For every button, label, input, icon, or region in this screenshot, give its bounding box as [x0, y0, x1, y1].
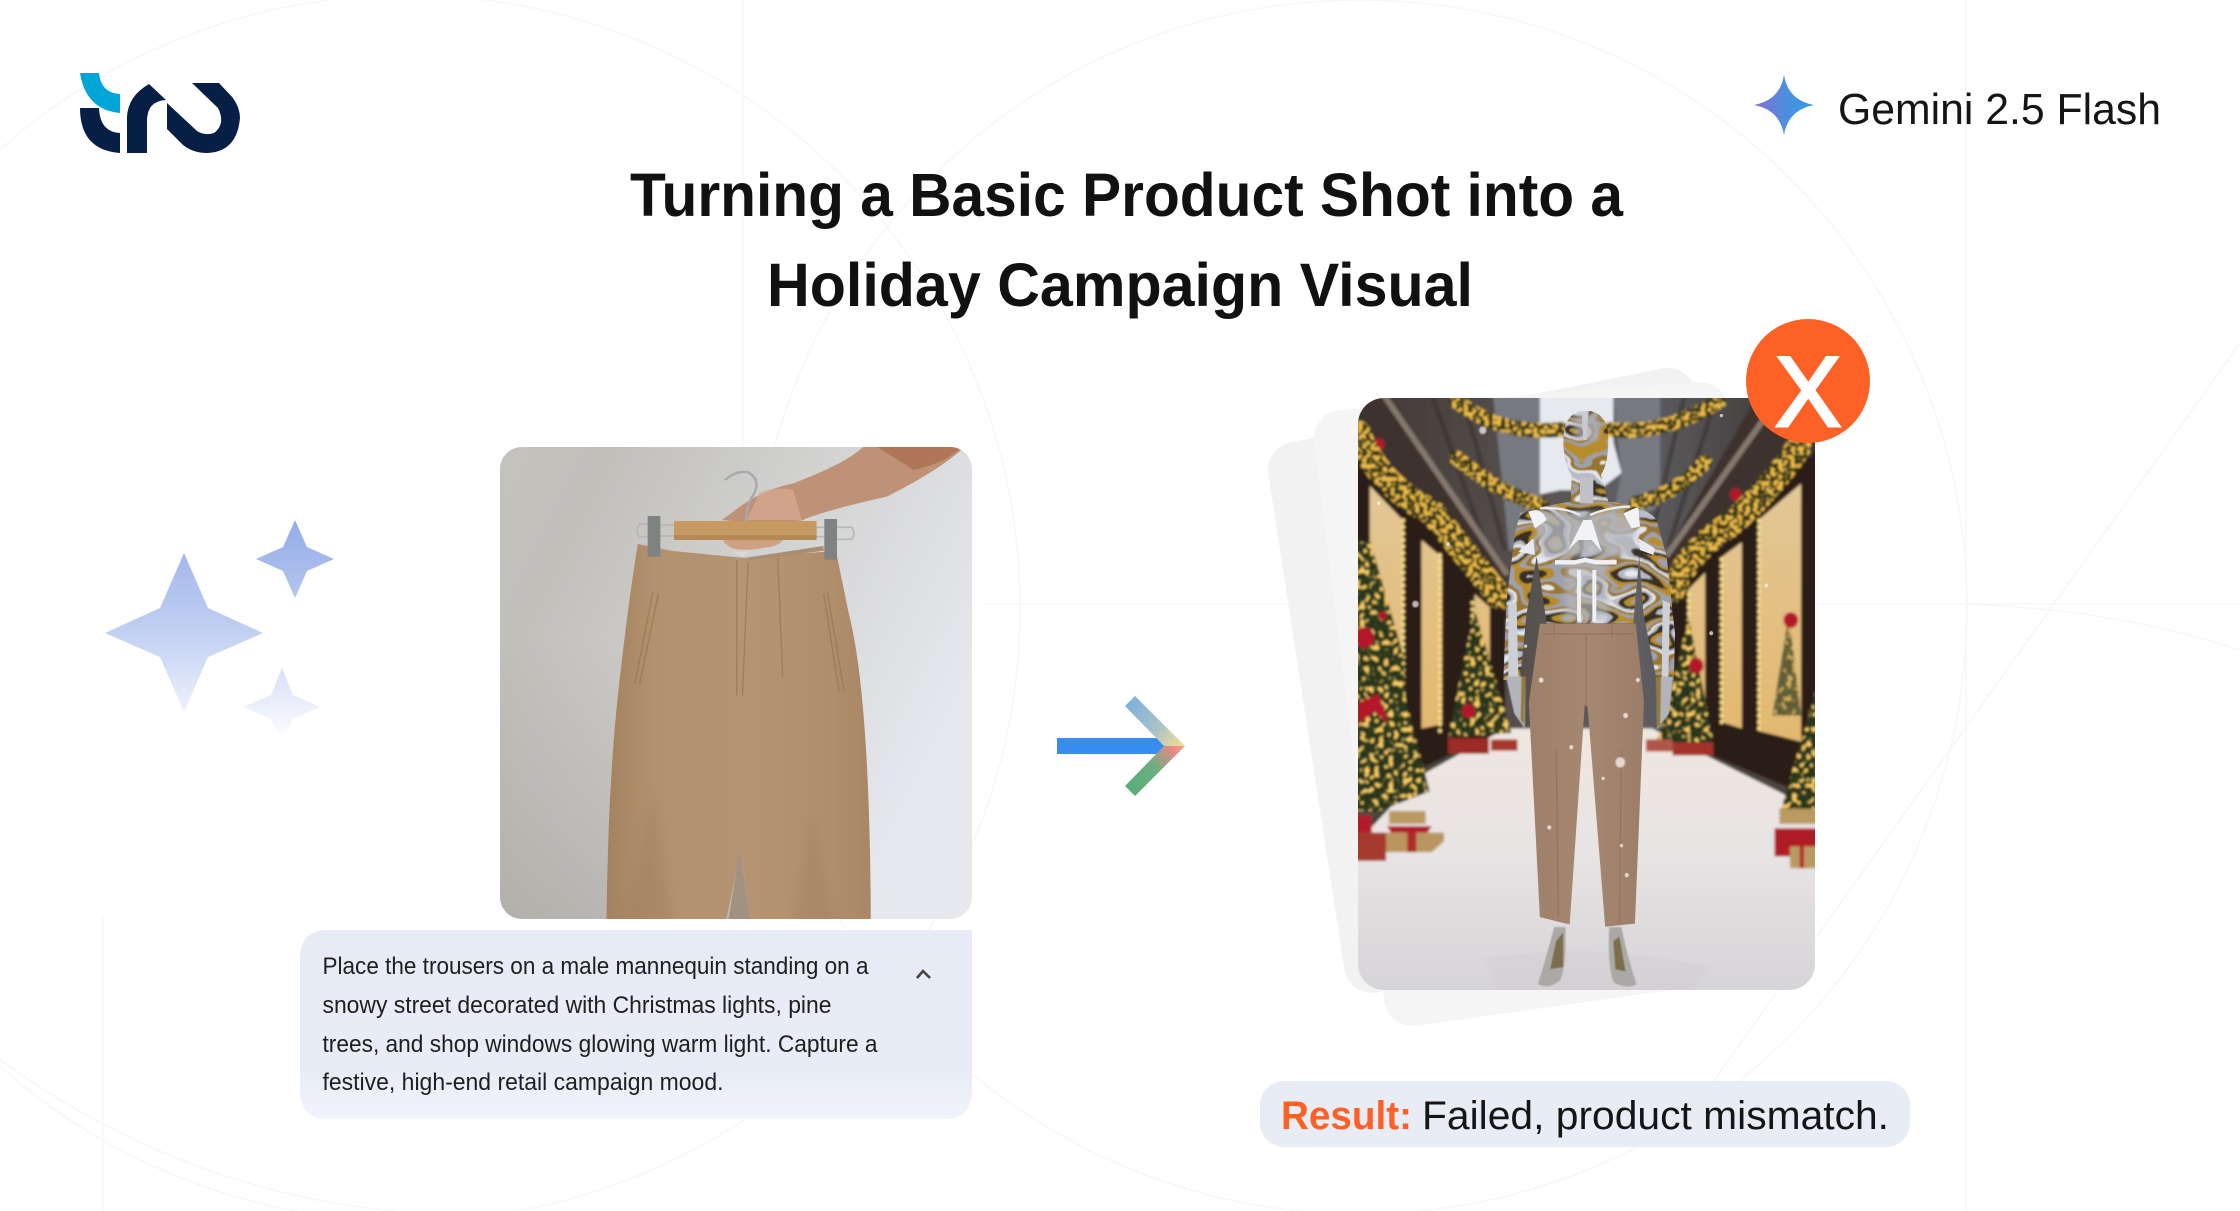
- prompt text: Place the trousers on a male mannequin standing on a: [322, 953, 869, 980]
- blurred street backdrop: [1350, 390, 1823, 997]
- shoes: [1538, 927, 1637, 987]
- gifts: [1350, 738, 1820, 868]
- snowflakes: [1377, 414, 1768, 877]
- chrome mannequin: [1500, 407, 1680, 683]
- fingers: [723, 540, 783, 550]
- panel: prompt caption: [300, 930, 972, 1119]
- panel: input product photo: [500, 445, 972, 921]
- logo: [80, 73, 240, 153]
- result text: Failed, product mismatch.: [1422, 1094, 1889, 1138]
- model name: Gemini 2.5 Flash: [1838, 85, 2161, 134]
- mismatched trousers: [1529, 624, 1644, 927]
- silver sheen over chest: [1532, 512, 1642, 557]
- garlands: [1358, 401, 1799, 598]
- forearms and hands: [1506, 677, 1673, 729]
- clips: [648, 516, 660, 557]
- curb: [1358, 736, 1786, 818]
- sky gap: [1540, 395, 1621, 494]
- hanger hook: [725, 472, 757, 522]
- result text: Result:: [1281, 1094, 1412, 1138]
- arrow: [1057, 696, 1185, 796]
- prompt text: trees, and shop windows glowing warm light. Capture a: [322, 1031, 878, 1058]
- icon: gemini star: [1754, 75, 1814, 135]
- snowy street: [1350, 729, 1823, 997]
- panel: generated holiday image: [1350, 390, 1823, 997]
- gemini badge: [1754, 75, 2161, 135]
- shop front: [1358, 452, 1815, 787]
- title: Turning a Basic Product Shot into a: [630, 161, 1624, 229]
- result pill: [1260, 1081, 1910, 1147]
- hanger wires: [637, 524, 854, 539]
- trousers: [607, 544, 871, 921]
- badge: failed X: [1746, 319, 1870, 447]
- wood bar: [674, 521, 817, 540]
- title: Holiday Campaign Visual: [767, 251, 1473, 319]
- trees: [1350, 542, 1817, 811]
- arm: [722, 445, 965, 523]
- waistband: [748, 546, 824, 561]
- prompt text: festive, high-end retail campaign mood.: [322, 1069, 724, 1096]
- upper walls: [1371, 398, 1787, 619]
- icon: sparkle stars: [105, 520, 334, 742]
- icon: chevron up: [917, 971, 930, 978]
- prompt text: snowy street decorated with Christmas lights, pine: [322, 992, 832, 1019]
- prompt text: [322, 953, 878, 1096]
- badge: failed X: X: [1775, 336, 1841, 447]
- panel: back cards: [1296, 396, 1740, 998]
- title: [630, 161, 1624, 319]
